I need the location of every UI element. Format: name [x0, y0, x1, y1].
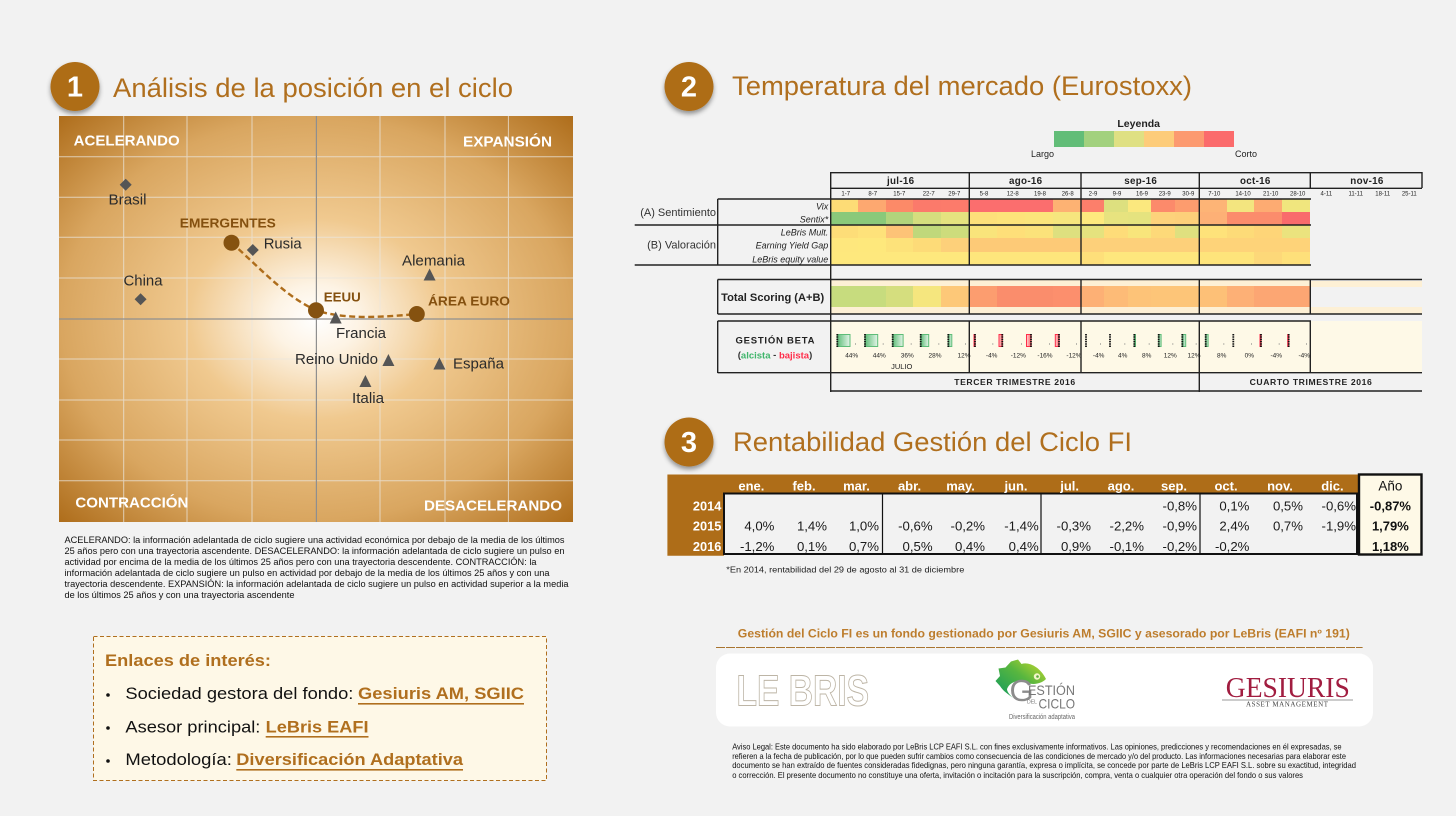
- month headers: oct-16: [1240, 176, 1271, 187]
- beta percentages: 44%: [845, 352, 858, 360]
- values 2016: 0,4%: [1009, 539, 1039, 554]
- date headers: 18-11: [1375, 192, 1391, 198]
- date headers: 25-11: [1402, 192, 1417, 198]
- row labels: Earning Yield Gap: [756, 241, 828, 251]
- values 2016: 0,1%: [797, 539, 827, 554]
- country labels: China: [124, 272, 163, 290]
- month headers: jun.: [1003, 478, 1028, 494]
- beta percentages: -12%: [1011, 352, 1026, 360]
- country labels: Reino Unido: [295, 351, 378, 368]
- date headers: 23-9: [1159, 192, 1171, 198]
- legal disclaimer: refieren a la fecha de publicación, por lo que pueden sufrir cambios como consecuencia de las condiciones de mercado y/o del producto. Las informaciones necesarias para elaborar este: [732, 752, 1346, 761]
- legal disclaimer: [732, 742, 1356, 780]
- number badge 2: 2: [681, 72, 697, 104]
- logo: Le Bris: LE BRIS: [736, 666, 869, 716]
- values 2016: 0,7%: [849, 539, 879, 554]
- month headers: jul-16: [886, 176, 915, 187]
- section 1 heading: [50, 62, 513, 111]
- chart explanatory text: información adelantada de ciclo sugiere un pulso en actividad por debajo de la media de los últimos 25 años y con una: [64, 568, 550, 578]
- month headers: ene.: [738, 478, 764, 494]
- beta percentages: 4%: [1118, 352, 1128, 360]
- chart explanatory text: 25 años pero con una trayectoria ascendente. DESACELERANDO: la información adelantada de ciclo sugiere un pulso en: [64, 546, 565, 556]
- values 2014: 0,5%: [1273, 498, 1303, 514]
- legend: Leyenda: [1117, 118, 1160, 130]
- link: gestora: [106, 684, 524, 705]
- values 2015: -0,9%: [1163, 518, 1197, 534]
- emerging country markers: [120, 179, 259, 305]
- date headers: 5-8: [980, 192, 989, 198]
- quadrant labels: [74, 132, 562, 514]
- total scoring row: [721, 279, 1422, 314]
- date headers: 14-10: [1235, 192, 1251, 198]
- month headers: [886, 176, 1384, 187]
- total scoring row: Total Scoring (A+B): [721, 292, 825, 304]
- values 2015: 1,4%: [797, 518, 827, 534]
- beta percentages: -4%: [1271, 352, 1282, 360]
- logo: Gesiuris: ASSET MANAGEMENT: [1246, 701, 1329, 709]
- link: asesor: [106, 718, 368, 738]
- date headers: 12-8: [1007, 192, 1019, 198]
- values 2016: 0,5%: [903, 539, 933, 554]
- link: asesor: Asesor principal:: [125, 718, 260, 736]
- values 2016: -1,2%: [740, 539, 775, 554]
- heat row: Sentix: [831, 212, 1310, 225]
- month headers: jul.: [1059, 478, 1079, 494]
- beta percentages: 28%: [928, 352, 942, 360]
- year labels: 2014: [693, 498, 722, 514]
- month headers: oct.: [1214, 478, 1238, 494]
- annual column: Año: [1378, 478, 1402, 494]
- beta percentages: 12%: [1164, 352, 1177, 360]
- year labels: 2016: [693, 539, 721, 554]
- annual column: 1,79%: [1372, 518, 1409, 534]
- chart explanatory text: [64, 535, 569, 600]
- quadrant labels: CONTRACCIÓN: [75, 494, 188, 512]
- heat row: LeBris equity value: [831, 252, 1310, 265]
- date headers: 30-9: [1182, 192, 1195, 198]
- country labels: Francia: [336, 325, 387, 342]
- date headers: [841, 192, 1417, 198]
- values 2016: -0,1%: [1110, 539, 1144, 554]
- beta percentages: -16%: [1037, 352, 1053, 360]
- regional labels: [180, 216, 510, 308]
- country labels: [108, 192, 505, 407]
- values 2015: 2,4%: [1219, 518, 1250, 534]
- regional labels: EMERGENTES: [180, 216, 276, 230]
- date headers: 8-7: [868, 192, 878, 198]
- panel: cycle position chart: [59, 116, 573, 522]
- negative bars: [974, 334, 1289, 346]
- country labels: España: [453, 356, 505, 372]
- developed country markers: [330, 268, 445, 387]
- chart explanatory text: actividad por encima de la media de los últimos 25 años pero con una trayectoria descendente. CONTRACCIÓN: la: [64, 557, 537, 567]
- beta percentages: [845, 352, 1310, 360]
- link: metodologia: Metodología:: [125, 750, 232, 769]
- values 2015: -0,2%: [951, 518, 985, 534]
- country labels: Rusia: [264, 236, 302, 252]
- month headers: feb.: [792, 478, 816, 494]
- quarter labels: TERCER TRIMESTRE 2016: [954, 377, 1076, 387]
- month headers: sep-16: [1124, 176, 1157, 187]
- values 2014: 0,1%: [1219, 498, 1250, 514]
- date headers: 11-11: [1348, 192, 1364, 198]
- gestion beta row: JULIO: [891, 362, 912, 371]
- date headers: 19-8: [1034, 192, 1047, 198]
- date headers: 29-7: [948, 192, 961, 198]
- number badge 2: [664, 62, 714, 111]
- month headers: sep.: [1161, 478, 1187, 494]
- date headers: 28-10: [1290, 192, 1306, 198]
- values 2015: 0,7%: [1273, 518, 1303, 534]
- title 1: Análisis de la posición en el ciclo: [113, 73, 513, 103]
- beta percentages: 44%: [873, 352, 886, 360]
- logo: Gestion del Ciclo: CICLO: [1038, 696, 1075, 712]
- year labels: [693, 498, 722, 554]
- link: gestora: Sociedad gestora del fondo:: [125, 684, 353, 703]
- beta percentages: -4%: [1093, 352, 1105, 360]
- annual column: -0,87%: [1370, 498, 1411, 514]
- quarter labels: [954, 377, 1372, 387]
- month headers: ago.: [1108, 478, 1134, 494]
- title 2: Temperatura del mercado (Eurostoxx): [732, 71, 1192, 101]
- beta percentages: -4%: [1299, 352, 1310, 360]
- heat row: Vix: [831, 199, 1310, 212]
- date headers: 16-9: [1136, 192, 1149, 198]
- row labels: LeBris equity value: [752, 254, 828, 264]
- cycle trajectory line: [232, 243, 417, 317]
- panel: links of interest: [94, 636, 546, 780]
- month headers: nov.: [1267, 478, 1293, 494]
- values 2016: [740, 539, 1250, 554]
- month headers: [738, 478, 1344, 494]
- chart explanatory text: de los últimos 25 años y con una trayectoria ascendente: [64, 590, 295, 600]
- legal disclaimer: o corrección. El presente documento no constituye una oferta, invitación o incitación para la suscripción, compra, venta o cualquier otra operación del fondo o sus valores: [732, 771, 1303, 780]
- beta percentages: -4%: [986, 352, 998, 360]
- links heading: Enlaces de interés:: [105, 652, 271, 670]
- values 2016: 0,9%: [1061, 539, 1091, 554]
- values 2015: 4,0%: [744, 518, 775, 534]
- returns footnote: *En 2014, rentabilidad del 29 de agosto al 31 de diciembre: [726, 564, 964, 574]
- values 2015: -0,3%: [1057, 518, 1091, 534]
- row labels: Sentix*: [800, 215, 829, 225]
- logo: Gestion del Ciclo: ESTIÓN: [1028, 683, 1075, 698]
- date headers: 2-9: [1089, 192, 1098, 198]
- link: asesor: LeBris EAFI: [266, 718, 368, 736]
- annual column: [1359, 474, 1422, 554]
- values 2016: -0,2%: [1215, 539, 1250, 554]
- legend: [1031, 118, 1257, 159]
- beta percentages: 8%: [1142, 352, 1152, 360]
- values 2015: [744, 518, 1356, 534]
- values 2015: -0,6%: [898, 518, 933, 534]
- values 2015: -1,4%: [1004, 518, 1039, 534]
- values 2016: 0,4%: [955, 539, 985, 554]
- month headers: ago-16: [1009, 176, 1043, 187]
- row labels: Vix: [816, 202, 829, 212]
- row labels: (A) Sentimiento: [640, 207, 716, 219]
- legend: Corto: [1235, 149, 1257, 159]
- values 2014: -0,6%: [1322, 498, 1356, 514]
- regional points: [224, 235, 425, 322]
- quadrant labels: DESACELERANDO: [424, 498, 562, 514]
- legend: Largo: [1031, 149, 1054, 159]
- values 2015: -1,9%: [1322, 518, 1356, 534]
- logo: Gesiuris: GESIURIS: [1226, 672, 1350, 704]
- date headers: 9-9: [1113, 192, 1122, 198]
- date headers: 22-7: [923, 192, 935, 198]
- link: metodologia: [106, 750, 464, 771]
- values 2014: -0,8%: [1163, 498, 1197, 514]
- values 2016: -0,2%: [1163, 539, 1197, 554]
- beta percentages: 12%: [957, 352, 971, 360]
- annual column: 1,18%: [1372, 539, 1409, 554]
- row labels: LeBris Mult.: [781, 228, 828, 238]
- number badge 3: [664, 418, 714, 466]
- market temperature table: [635, 172, 1422, 392]
- logo: Gestion del Ciclo: G: [1010, 673, 1034, 708]
- section 3 heading: [664, 418, 1132, 466]
- month headers: nov-16: [1350, 176, 1384, 187]
- country labels: Italia: [352, 390, 385, 407]
- date headers: 26-8: [1062, 192, 1074, 198]
- legal disclaimer: documento se han extraído de fuentes consideradas fidedignas, pero ninguna garantía, expresa o implícita, se concede por parte de LeBris LCP EAFI S.L. sobre su exactitud, integridad: [732, 761, 1356, 770]
- month headers: dic.: [1321, 478, 1344, 494]
- panel: logos: [716, 654, 1373, 726]
- beta percentages: 0%: [1245, 352, 1254, 360]
- quadrant labels: EXPANSIÓN: [463, 132, 552, 150]
- date headers: 7-10: [1208, 192, 1221, 198]
- heat row: LeBris Mult.: [831, 225, 1310, 238]
- quadrant labels: ACELERANDO: [74, 132, 180, 150]
- chart explanatory text: ACELERANDO: la información adelantada de ciclo sugiere una actividad económica por debajo de la media de los últimos: [64, 535, 565, 545]
- beta percentages: 36%: [901, 352, 914, 360]
- quarter labels: CUARTO TRIMESTRE 2016: [1250, 377, 1372, 387]
- gestion beta row: (alcista - bajista): [738, 350, 812, 361]
- month headers: mar.: [843, 478, 870, 494]
- values 2014: [1163, 498, 1356, 514]
- legal disclaimer: Aviso Legal: Este documento ha sido elaborado por LeBris LCP EAFI S.L. con fines exclusivamente informativos. Las opiniones, predicciones y recomendaciones en él expresadas, se: [732, 742, 1342, 752]
- row labels: (B) Valoración: [647, 240, 716, 252]
- chart explanatory text: trayectoria descendente. EXPANSIÓN: la información adelantada de ciclo sugiere un pulso en actividad superior a la media: [64, 579, 569, 589]
- date headers: 4-11: [1321, 192, 1333, 198]
- positive bars: [837, 334, 1208, 346]
- year labels: 2015: [693, 518, 721, 534]
- beta percentages: 12%: [1187, 352, 1201, 360]
- gestion beta row: [736, 321, 1422, 373]
- fund description: Gestión del Ciclo FI es un fondo gestionado por Gesiuris AM, SGIIC y asesorado por LeBris (EAFI nº 191): [738, 628, 1350, 640]
- values 2015: -2,2%: [1110, 518, 1144, 534]
- regional labels: ÁREA EURO: [428, 294, 510, 308]
- regional labels: EEUU: [324, 290, 361, 304]
- row labels: [640, 202, 829, 264]
- link: metodologia: Diversificación Adaptativa: [236, 750, 464, 769]
- heat row: Earning Yield Gap: [831, 238, 1310, 252]
- zero axis ticks: [837, 334, 1289, 347]
- gestion beta row: GESTIÓN BETA: [736, 334, 815, 346]
- logo: Gestion del Ciclo: Diversificación adaptativa: [1009, 714, 1075, 721]
- country labels: Alemania: [402, 252, 466, 270]
- date headers: 21-10: [1263, 192, 1279, 198]
- values 2015: 1,0%: [849, 518, 879, 534]
- date headers: 1-7: [841, 192, 851, 198]
- month headers: abr.: [898, 478, 921, 494]
- returns table: [667, 474, 1422, 556]
- logo: Gestion del Ciclo: DEL: [1027, 700, 1037, 706]
- month headers: may.: [946, 478, 975, 494]
- beta percentages: 8%: [1217, 352, 1227, 360]
- country labels: Brasil: [108, 192, 146, 208]
- number badge 3: 3: [681, 427, 697, 459]
- logo: Gestion del Ciclo: [996, 660, 1075, 721]
- beta percentages: -12%: [1066, 352, 1082, 360]
- section 2 heading: [664, 62, 1192, 111]
- title 3: Rentabilidad Gestión del Ciclo FI: [733, 427, 1132, 457]
- number badge 1: 1: [67, 72, 83, 104]
- date headers: 15-7: [893, 192, 906, 198]
- number badge 1: [50, 62, 100, 111]
- link: gestora: Gesiuris AM, SGIIC: [358, 684, 524, 703]
